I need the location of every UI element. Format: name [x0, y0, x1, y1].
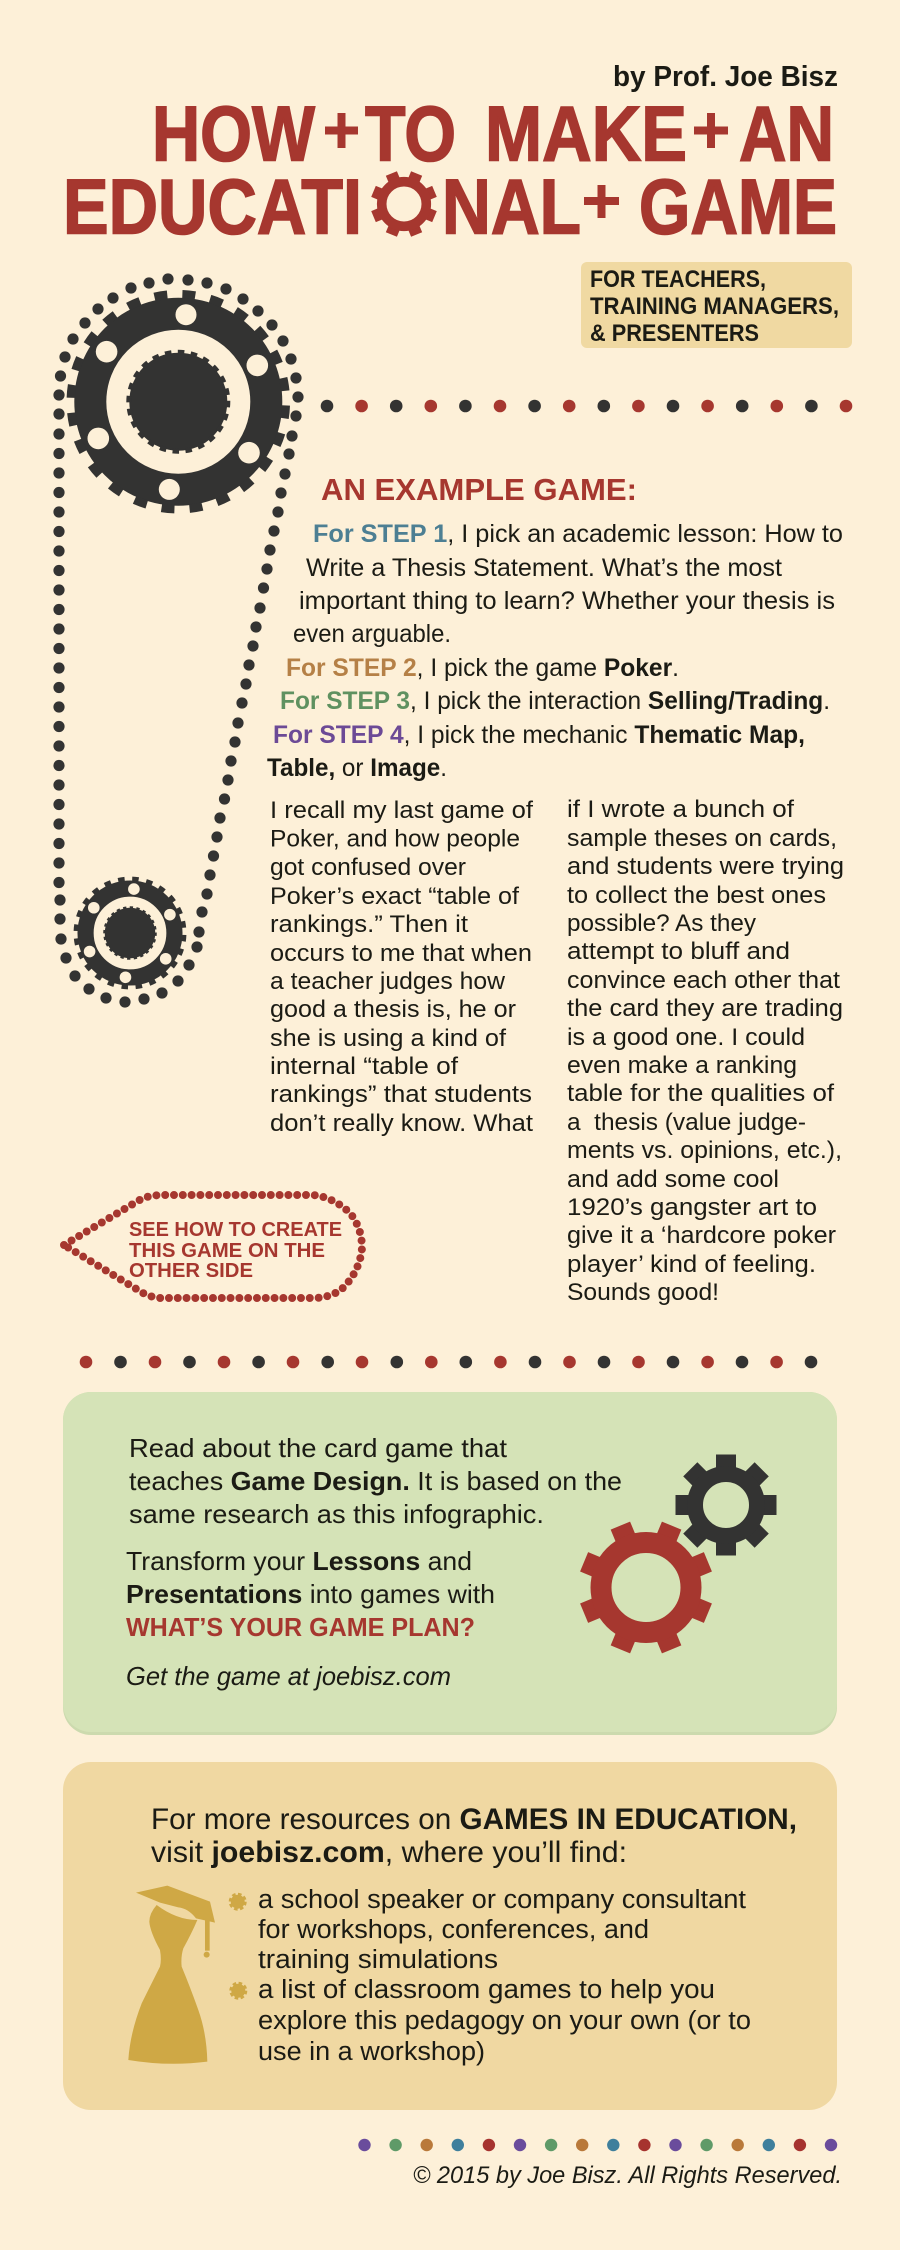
text block: left column: good a thesis is, he or [270, 996, 516, 1023]
icon: small gear [74, 877, 186, 989]
text block: right column: convince each other that [567, 967, 840, 994]
text block: right column: ments vs. opinions, etc.), [567, 1137, 842, 1164]
dotted divider bottom [358, 2139, 837, 2151]
icon: bullet gear two [231, 1983, 246, 1998]
heading: an example game: AN EXAMPLE GAME: [321, 472, 637, 507]
text block: bullet two [258, 1976, 751, 2066]
text block: right column: attempt to bluff and [567, 938, 790, 965]
callout: see how to create: SEE HOW TO CREATE [129, 1218, 342, 1241]
panel: yellow resources [63, 1762, 837, 2110]
chain of dots [53, 273, 304, 1008]
text block: steps: For STEP 3, I pick the interaction Selling/Trading. [280, 687, 830, 715]
text block: left column: I recall my last game of [270, 797, 533, 824]
panel: green card game promo [63, 1392, 837, 1735]
text block: bullet one: training simulations [258, 1946, 498, 1974]
title [63, 90, 837, 250]
icon: red gear [584, 1526, 708, 1649]
text block: left column: don’t really know. What [270, 1110, 533, 1137]
title: NAL [442, 162, 581, 250]
callout: see how to create: OTHER SIDE [129, 1259, 253, 1282]
text block: steps: For STEP 1, I pick an academic lesson: How to [313, 520, 843, 548]
text block: right column: Sounds good! [567, 1279, 719, 1306]
panel: green card game promo: Read about the card game that [129, 1433, 508, 1463]
audience tag: TRAINING MANAGERS, [590, 293, 839, 320]
text block: right column: and add some cool [567, 1166, 779, 1193]
text block: left column: occurs to me that when [270, 940, 532, 967]
title: TO [365, 90, 456, 178]
text block: bullet one: a school speaker or company consultant [258, 1886, 746, 1914]
text block: left column: rankings” that students [270, 1081, 532, 1108]
icon: bullet gear one [230, 1894, 245, 1909]
audience tag: & PRESENTERS [590, 320, 759, 347]
text block: bullet two: use in a workshop) [258, 2038, 485, 2066]
icon: large gear [67, 291, 289, 513]
audience tag: FOR TEACHERS, [590, 266, 766, 293]
text block: right column: to collect the best ones [567, 882, 826, 909]
title: HOW [152, 90, 315, 178]
panel: green card game promo: Get the game at joebisz.com [126, 1661, 451, 1691]
text block: steps: For STEP 2, I pick the game Poker. [286, 654, 679, 682]
panel: green card game promo: Presentations into games with [126, 1579, 495, 1609]
panel: green card game promo: Transform your Lessons and [126, 1546, 472, 1576]
text block: right column: player’ kind of feeling. [567, 1251, 816, 1278]
text block: right column [567, 796, 844, 1306]
audience tag [581, 262, 852, 348]
text block: bullet two: explore this pedagogy on your own (or to [258, 2007, 751, 2035]
icon: dark gear [676, 1454, 776, 1556]
text block: steps [267, 520, 843, 782]
text block: right column: is a good one. I could [567, 1024, 805, 1051]
text block: right column: sample theses on cards, [567, 825, 837, 852]
text block: right column: give it a ‘hardcore poker [567, 1222, 836, 1249]
text block: right column: 1920’s gangster art to [567, 1194, 817, 1221]
text block: steps: even arguable. [293, 620, 451, 648]
text block: left column: rankings.” Then it [270, 911, 468, 938]
text block: steps: important thing to learn? Whether your thesis is [299, 587, 835, 615]
icon: graduate figure [128, 1886, 215, 2064]
title: GAME [639, 162, 837, 250]
byline: by Prof. Joe Bisz [613, 61, 838, 93]
text block: right column: possible? As they [567, 910, 756, 937]
text block: left column: a teacher judges how [270, 968, 506, 995]
title: MAKE [485, 90, 687, 178]
text block: bullet one: for workshops, conferences, and [258, 1916, 649, 1944]
title: EDUCATI [63, 162, 362, 250]
panel: green card game promo: WHAT’S YOUR GAME PLAN? [126, 1612, 475, 1642]
title: AN [739, 90, 834, 178]
text block: left column: Poker’s exact “table of [270, 883, 519, 910]
panel: green card game promo: same research as this infographic. [129, 1499, 544, 1529]
text block: bullet two: a list of classroom games to help you [258, 1976, 715, 2004]
text block: right column: table for the qualities of [567, 1080, 834, 1107]
text block: left column [270, 797, 533, 1137]
callout: see how to create [64, 1195, 362, 1298]
text block: steps: For STEP 4, I pick the mechanic Thematic Map, [273, 721, 805, 749]
panel: green card game promo: teaches Game Design. It is based on the [129, 1466, 622, 1496]
panel: yellow resources: For more resources on GAMES IN EDUCATION, [151, 1803, 797, 1836]
text block: steps: Table, or Image. [267, 754, 447, 782]
copyright: © 2015 by Joe Bisz. All Rights Reserved. [413, 2162, 842, 2189]
text block: right column: even make a ranking [567, 1052, 797, 1079]
text block: bullet one [258, 1886, 746, 1974]
text block: left column: Poker, and how people [270, 826, 520, 852]
text block: right column: the card they are trading [567, 995, 843, 1022]
dotted divider middle [80, 1356, 817, 1368]
panel: yellow resources: visit joebisz.com, where you’ll find: [151, 1836, 627, 1869]
text block: left column: internal “table of [270, 1053, 458, 1080]
dotted divider top [321, 400, 852, 412]
text block: right column: and students were trying [567, 853, 844, 880]
callout: see how to create: THIS GAME ON THE [129, 1239, 325, 1262]
text block: right column: a thesis (value judge- [567, 1109, 806, 1136]
text block: steps: Write a Thesis Statement. What’s the most [306, 554, 782, 582]
text block: right column: if I wrote a bunch of [567, 796, 794, 823]
text block: left column: got confused over [270, 854, 466, 881]
icon: gear letter O [374, 174, 434, 234]
text block: left column: she is using a kind of [270, 1025, 506, 1052]
